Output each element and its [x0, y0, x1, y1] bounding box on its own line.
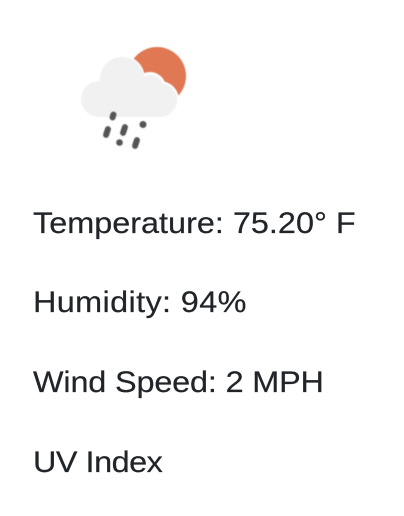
cloud [81, 55, 179, 119]
icon: sun behind cloud with rain [81, 46, 187, 150]
sun [128, 47, 186, 105]
text: temperature: Temperature: 75.20° F [33, 207, 356, 240]
text: UV index: UV Index [33, 446, 162, 479]
text: humidity: Humidity: 94% [33, 286, 247, 319]
rain [102, 111, 146, 150]
text: wind speed: Wind Speed: 2 MPH [33, 366, 324, 399]
